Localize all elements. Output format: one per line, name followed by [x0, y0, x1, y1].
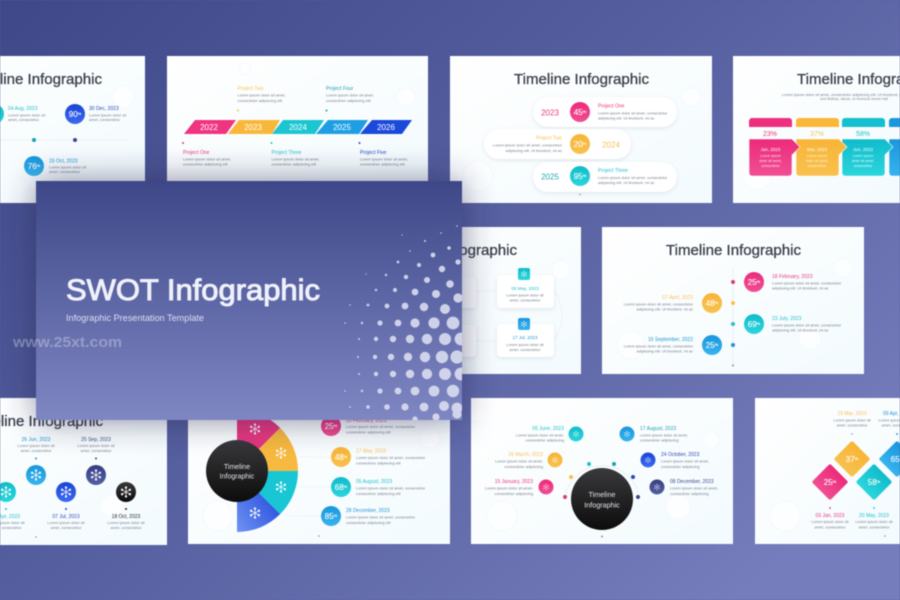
item: 18 Oct: 18 Oct, 2023 [112, 514, 141, 520]
item: 20 May: 58 [868, 478, 877, 487]
item: 90 percent: 90 [69, 110, 78, 119]
page mark [884, 535, 886, 537]
year ribbon: 2026 [377, 123, 395, 132]
heading: Timeline Infographic [514, 71, 649, 88]
item: 15 September: 25 [706, 341, 715, 350]
item: 20 May: Lorem ipsum dolor sit [855, 519, 894, 524]
project five: Lorem ipsum dolor sit amet, [360, 156, 408, 162]
item: 08 December: 08 December, 2023 [670, 479, 714, 485]
pill: project one: 2023 [541, 108, 559, 118]
project three: consectetur adipiscing elit [272, 162, 317, 166]
project one [182, 142, 231, 166]
item: 07 April: % [715, 300, 719, 305]
item: 17 August: consectetur adipiscing [640, 438, 678, 442]
item: 28 December: Lorem ipsum dolor sit amet, consectetur [346, 514, 416, 520]
page mark [35, 536, 37, 538]
hero shadow [36, 181, 462, 420]
year ribbon: 2023 [244, 123, 262, 132]
item: 17 May: % [344, 454, 348, 459]
arrow block 4 [889, 139, 900, 176]
item: 28 February: Lorem ipsum dolor sit amet, consectetur [346, 424, 416, 429]
item: 28 February: 25 [325, 422, 334, 431]
arrow block 2: consectetur [808, 164, 827, 168]
percent labels: 23% [763, 131, 777, 138]
pill: project two: adipiscing elit. Ut tincidunt, mi ac [506, 148, 562, 153]
pill: project two: 2024 [602, 140, 620, 150]
item: 19 Mar: 19 Mar, 2023 [837, 411, 867, 417]
item: 17 May: 48 [335, 453, 344, 462]
arrow block 1 [749, 139, 800, 176]
item: 17 May [331, 447, 426, 467]
item: 26 March: 26 March, 2023 [508, 452, 543, 458]
subtitle: orci finibus, lacus, ut rhoncus lorem nisl [820, 96, 888, 101]
center circle: Infographic [220, 474, 255, 480]
item: 05 August: Lorem ipsum dolor sit amet, consectetur [356, 486, 426, 490]
item: 26 Jun: Lorem ipsum dolor sit [17, 443, 56, 448]
item: 23 July: adipiscing elit. Ut tincidunt, mi ac [772, 328, 828, 332]
item: 03 Jan: % [833, 479, 837, 484]
subtitle [782, 92, 900, 101]
pill: project three: % [583, 173, 587, 178]
pill: project one: 45 [574, 108, 583, 117]
item: 23 July [744, 314, 842, 334]
arrow block 3: Jun, 2023 [853, 147, 873, 152]
item: 90 percent [65, 104, 127, 124]
item: 15 September: adipiscing elit. Ut tincidunt, mi ac [637, 348, 693, 354]
arc dots [563, 462, 640, 499]
page mark [579, 194, 581, 195]
arrow block 3: Lorem ipsum [853, 154, 873, 158]
item: 17 August: Lorem ipsum dolor sit amet, [640, 432, 688, 438]
item: 05 August: consectetur adipiscing elit [356, 491, 401, 496]
item: 15 September: 15 September, 2022 [648, 337, 693, 343]
pill: project one [533, 97, 677, 127]
item: 04 Aug: 04 Aug, 2023 [8, 106, 38, 112]
item: 07 April: 48 [706, 299, 715, 308]
pill: project one: % [583, 109, 587, 114]
project one: Lorem ipsum dolor sit amet, [183, 156, 231, 162]
item: 04 Aug: Lorem ipsum dolor sit [8, 112, 46, 118]
item: 25 Sep: 25 Sep, 2023 [81, 437, 111, 443]
heading: Timeline Infographic [382, 242, 517, 259]
item: 04 Aug [0, 104, 46, 124]
project two [237, 86, 286, 112]
item: 17 August: 17 August, 2023 [640, 426, 676, 432]
panel: slide bottom row 2, half pie [188, 398, 450, 544]
card: 09 May [497, 268, 554, 308]
item: 19 Mar: Lorem ipsum dolor sit [833, 418, 872, 422]
item: 76 percent: amet, consectetur [49, 169, 81, 174]
pill: project one: adipiscing elit. Ut tincidunt, mi ac [598, 116, 654, 120]
item: 18 Oct: amet, consectetur [111, 525, 142, 530]
pill: project three: Lorem ipsum dolor sit amet, consectetur [598, 175, 668, 180]
project three [270, 142, 320, 166]
percent labels: 37% [810, 131, 824, 138]
project four [326, 86, 374, 112]
item: 18 February: adipiscing elit. Ut tincidunt, mi ac [772, 286, 828, 290]
item: 08 December: consectetur adipiscing [670, 491, 708, 496]
title: SWOT Infographic [66, 274, 320, 307]
item: 15 September: Lorem ipsum dolor sit amet, consectetur [624, 344, 694, 348]
connector lines [285, 457, 331, 516]
item: 20 May: amet, consectetur [859, 524, 890, 530]
item: 08 December [650, 479, 718, 496]
panel: slide top row 4, arrow blocks [733, 56, 900, 203]
item: 23 July: 69 [748, 320, 757, 329]
item: 07 April [624, 293, 722, 313]
pill: project two: % [583, 141, 587, 146]
percent labels [763, 131, 870, 138]
arc [565, 466, 639, 497]
subtitle: Infographic Presentation Template [66, 313, 204, 323]
item: 05 August: 05 August, 2023 [356, 479, 392, 485]
item: 28 December: % [334, 513, 338, 518]
item: 20 May: % [877, 479, 881, 484]
arrow block 1: Lorem ipsum [760, 154, 781, 158]
card: 17 Jul: Lorem ipsum dolor sit [506, 342, 545, 347]
arrow block 2 [796, 139, 847, 176]
item: 09 Apr: 65 [891, 455, 900, 464]
item: 18 Oct [107, 482, 146, 530]
card: 09 May: amet, consectetur [510, 298, 541, 302]
item: 15 September: % [715, 342, 719, 347]
item: April [0, 482, 26, 530]
watermark: www.25xt.com [12, 334, 122, 351]
arrow block 2: Mar, 2023 [807, 147, 828, 152]
item: 18 February: 25 [748, 278, 757, 287]
arrow block 3: consectetur [854, 164, 873, 168]
item: 28 February: % [334, 423, 338, 428]
item: 07 Jul: Lorem ipsum dolor sit [47, 520, 86, 525]
item: 24 October: Lorem ipsum dolor sit amet, [661, 458, 709, 464]
item: 19 Mar: amet, consectetur [837, 422, 868, 428]
panel: slide bottom row 1, zigzag circles [0, 398, 167, 545]
item: 17 May: 17 May, 2023 [356, 448, 386, 454]
item: 15 January [485, 479, 554, 496]
item: 08 December: Lorem ipsum dolor sit amet, [670, 486, 718, 490]
project two: Lorem ipsum dolor sit amet, [238, 92, 286, 98]
item: 76 percent [24, 156, 87, 176]
year ribbon: 2025 [333, 123, 351, 132]
item: 18 February [744, 272, 842, 292]
timeline axis [0, 138, 129, 142]
card: 09 May: 09 May, 2023 [511, 286, 539, 291]
project three: Project Three [272, 150, 302, 156]
arrow block 2: dolor sit amet, [806, 159, 828, 163]
item: 07 April: 07 April, 2023 [662, 295, 693, 301]
year ribbon: 2022 [200, 123, 218, 132]
item: 26 March: consectetur adipiscing [504, 464, 543, 469]
pill: project two [484, 129, 631, 159]
item: 07 Jul: amet, consectetur [51, 525, 82, 530]
item: 90 percent: Lorem ipsum dolor sit [89, 112, 127, 118]
item: 23 July: Lorem ipsum dolor sit amet, consectetur [772, 322, 842, 328]
item: 24 October: consectetur adipiscing [661, 464, 700, 469]
item: 19 Mar: 37 [846, 455, 855, 464]
item: 26 Jun: 26 Jun, 2023 [22, 437, 51, 443]
pill: project three: 2025 [541, 172, 559, 182]
center circle: Infographic [584, 500, 620, 510]
page mark [601, 536, 603, 538]
item: 07 April: Lorem ipsum dolor sit amet, consectetur [624, 302, 694, 306]
panel: hero cover [36, 181, 467, 422]
card: 17 Jul: amet, consectetur [510, 347, 541, 352]
item: 15 January: consectetur adipiscing [494, 491, 533, 496]
panel: slide top row 1, timeline with percentages [0, 56, 145, 203]
left cards [420, 277, 476, 357]
item: 23 July: % [757, 321, 761, 326]
arrow block 3: dolor sit amet, [852, 159, 874, 163]
project two: Project Two [238, 86, 264, 92]
item: 15 January: 15 January, 2023 [495, 479, 533, 485]
item: 03 Jan: 03 Jan, 2023 [816, 513, 845, 519]
item: 05 August: 68 [335, 483, 344, 492]
panel: slide top row 3, pills [450, 56, 712, 203]
item: 05 June: consectetur adipiscing [526, 438, 564, 442]
item: 20 May [855, 464, 894, 530]
card: 17 Jul [497, 318, 554, 357]
item: 76 percent: % [37, 163, 41, 168]
project two: consectetur adipiscing elit [238, 98, 283, 103]
halftone dots [344, 225, 467, 422]
project four: Project Four [326, 86, 354, 92]
item: 09 Apr [878, 411, 900, 477]
item: 03 Jan: amet, consectetur [815, 524, 846, 530]
pill: project two: Lorem ipsum dolor sit amet, consectetur [493, 142, 563, 148]
item: 25 Sep: amet, consectetur [81, 448, 112, 453]
panel: slide bottom row 4, diamonds [755, 398, 900, 544]
center circle: Timeline [589, 490, 615, 499]
item: 28 February: 28 February, 2023 [346, 418, 387, 424]
item: 24 October [640, 452, 709, 469]
project five [358, 142, 408, 166]
item: 28 December: 85 [325, 512, 334, 521]
arrow block 2: Lorem ipsum [807, 154, 827, 158]
item: 28 February [321, 416, 416, 436]
item: 24 October: 24 October, 2023 [661, 452, 700, 458]
project three: Lorem ipsum dolor sit amet, [272, 156, 320, 162]
item: 15 January: Lorem ipsum dolor sit amet, [485, 486, 533, 490]
item: 03 Jan: 25 [824, 478, 833, 487]
card: 09 May: Lorem ipsum dolor sit [506, 292, 545, 298]
item: 19 Mar: % [855, 456, 859, 461]
year ribbon [184, 120, 412, 134]
item: 18 Oct: Lorem ipsum dolor sit [107, 520, 146, 525]
percent labels: 58% [856, 131, 870, 138]
page mark [318, 535, 320, 537]
center circle [571, 468, 633, 530]
center circle: Timeline [224, 464, 250, 471]
center circle [206, 440, 268, 502]
item: 20 May: 20 May, 2023 [859, 513, 889, 519]
item: 17 May: consectetur adipiscing elit [356, 460, 401, 466]
pill: project three: adipiscing elit. Ut tincidunt, mi ac [598, 180, 654, 185]
project five: consectetur adipiscing elit [360, 162, 405, 166]
item: 28 December [321, 506, 416, 526]
item: 17 May: Lorem ipsum dolor sit amet, consectetur [356, 455, 426, 460]
project five: Project Five [360, 150, 387, 156]
item: 28 February: consectetur adipiscing elit [346, 430, 391, 434]
half pie chart [237, 410, 298, 532]
item: 05 June [516, 426, 584, 442]
card: 17 Jul: 17 Jul, 2023 [512, 335, 538, 340]
pill: project two: 20 [574, 140, 583, 149]
vertical axis [731, 268, 735, 367]
item: 26 Jun [17, 437, 56, 485]
project one: Project One [183, 150, 210, 156]
item: 17 August [620, 426, 688, 442]
connectors [476, 290, 562, 341]
pill: project two: Project Two [536, 136, 562, 142]
item: 25 Sep [77, 437, 116, 485]
item: 76 percent: 15 Oct, 2023 [49, 158, 78, 164]
item: 05 August [331, 477, 426, 497]
year ribbon: 2024 [289, 123, 307, 132]
item: 18 February: % [757, 279, 761, 284]
pill: project three [533, 162, 677, 192]
item: 26 Jun: amet, consectetur [21, 448, 52, 453]
item: 18 February: Lorem ipsum dolor sit amet, consectetur [772, 280, 842, 286]
item: 76 percent: 76 [28, 162, 37, 171]
arrow block 1: consectetur [761, 164, 781, 168]
item: 03 Jan: Lorem ipsum dolor sit [811, 519, 850, 524]
project one: consectetur adipiscing elit [183, 162, 228, 166]
item: 19 Mar [833, 411, 872, 477]
item: 07 April: adipiscing elit. Ut tincidunt, mi ac [637, 306, 693, 312]
item: 05 August: % [344, 484, 348, 489]
item: 76 percent: Lorem ipsum dolor sit [49, 164, 87, 170]
project four: consectetur adipiscing elit [326, 98, 371, 103]
panel: slide top row 2, year ribbon [167, 56, 428, 203]
item: 90 percent: % [78, 111, 82, 116]
item: 28 December: 28 December, 2023 [346, 508, 390, 514]
arrow block 1: Jan, 2023 [761, 147, 781, 152]
item: 90 percent: amet, consectetur [89, 117, 121, 122]
item: 18 February: 18 February, 2023 [772, 274, 813, 280]
top tabs [749, 118, 900, 127]
arrow block 1: dolor sit amet, [759, 159, 782, 163]
panel: slide middle, cards [319, 227, 581, 374]
item: 26 March: Lorem ipsum dolor sit amet, [495, 458, 543, 464]
item: 07 Jul [47, 482, 86, 530]
item: 05 June: Lorem ipsum dolor sit amet, [516, 432, 564, 438]
item: 23 July: 23 July, 2023 [772, 316, 802, 322]
panel: slide bottom row 3, radial [471, 398, 733, 544]
item: 25 Sep: Lorem ipsum dolor sit [77, 443, 116, 448]
panel: slide vertical timeline [602, 227, 864, 374]
pill: project one: Lorem ipsum dolor sit amet, consectetur [598, 110, 668, 116]
arrow block 3 [842, 139, 893, 176]
pill: project three: Project Three [598, 168, 628, 174]
item: 03 Jan [811, 464, 850, 530]
item: 05 June: 05 June, 2023 [532, 426, 564, 432]
project four: Lorem ipsum dolor sit amet, [326, 92, 374, 98]
item: 07 Jul: 07 Jul, 2023 [52, 514, 80, 520]
item: 15 September [624, 335, 722, 355]
item: 04 Aug: amet, consectetur [8, 117, 40, 122]
item: 90 percent: 30 Dec, 2023 [89, 106, 119, 112]
item: 28 December: consectetur adipiscing elit [346, 520, 391, 525]
pill: project three: 95 [574, 172, 583, 181]
heading: Timeline Infographic [666, 242, 801, 259]
item: 26 March [495, 452, 562, 469]
pill: project one: Project One [598, 104, 625, 110]
